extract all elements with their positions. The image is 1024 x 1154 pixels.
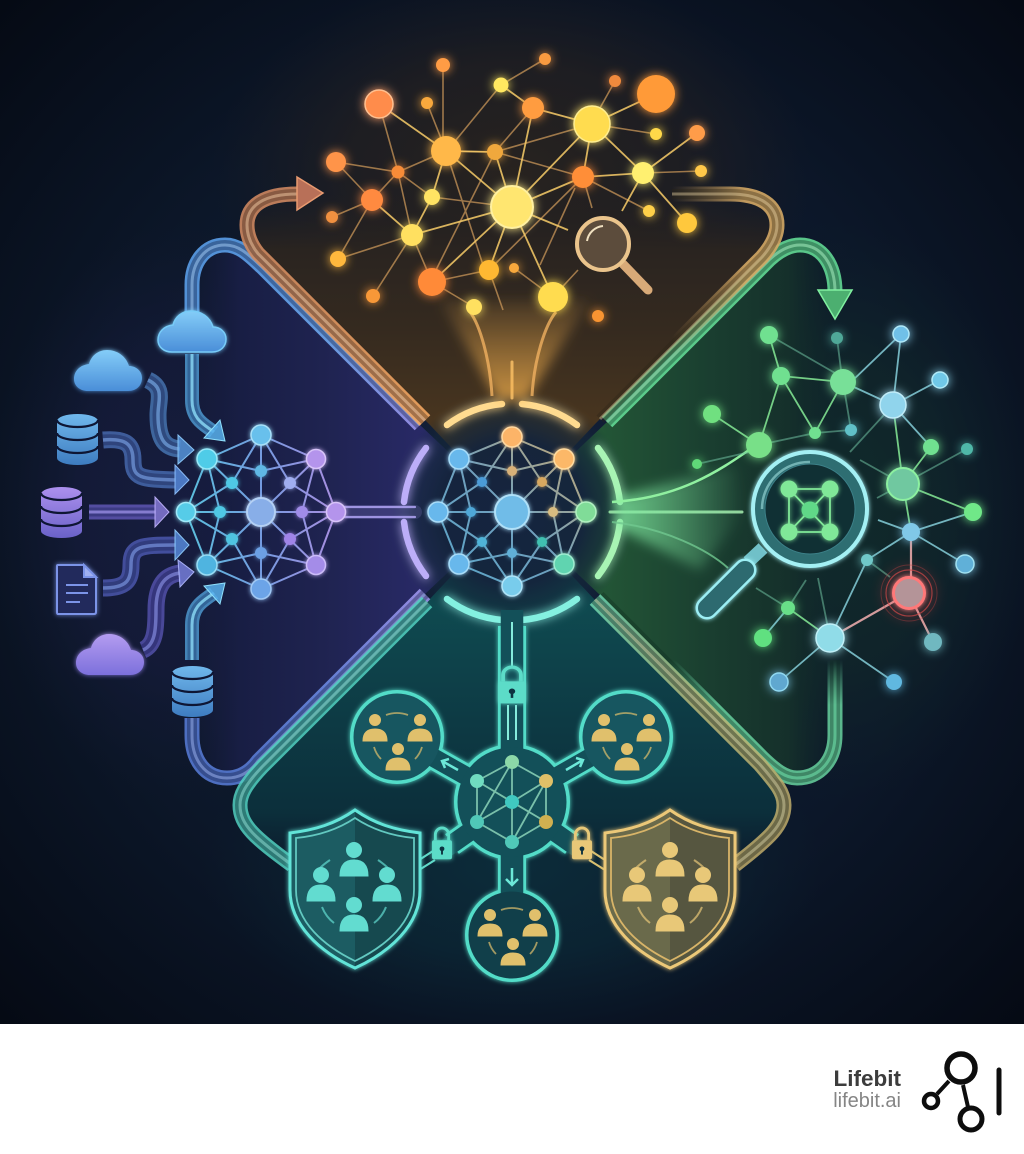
arrow: into discovery network (297, 177, 323, 210)
arrow: cloud to hub (148, 380, 194, 464)
icon: small magnifier (577, 218, 648, 290)
border band: blue lower (192, 594, 425, 778)
outline of joined shapes (350, 626, 673, 982)
background glow: bottom (202, 695, 822, 1035)
icon: database lower (172, 666, 213, 717)
network: central hub (428, 427, 596, 596)
network: federation hub graph (470, 755, 553, 849)
alert edges (830, 532, 933, 642)
network: analysis graph (692, 326, 982, 691)
arrow: discovery into analysis (818, 290, 852, 319)
left hub edges (186, 435, 336, 589)
central hub background (390, 390, 634, 634)
border band: green upper (607, 245, 835, 422)
panel: analysis (right, green) (512, 245, 835, 778)
left hub nodes (176, 425, 346, 599)
green edges (712, 335, 973, 638)
logo text: Lifebit (834, 1066, 901, 1091)
dim edges (697, 335, 967, 638)
connector: hub spokes (345, 362, 742, 517)
border band: gold (600, 194, 777, 419)
arrow: top cloud to hub (192, 354, 225, 441)
small direction arrows and stripes (419, 622, 605, 885)
border band: tan (595, 600, 784, 865)
icon: teal shield (290, 810, 420, 968)
icon: people group upper left (363, 713, 432, 770)
arrow: database to hub (103, 440, 189, 494)
icon: database purple (41, 487, 82, 538)
icon: cloud source upper (74, 350, 142, 391)
border band: teal left (240, 602, 427, 865)
inner arcs around hub (404, 404, 620, 620)
network: federated node structure (350, 610, 673, 982)
dim edges (332, 59, 701, 310)
panel: federation (bottom, teal) (240, 512, 784, 865)
icon: large magnifier (707, 452, 867, 608)
arrow: purple database to hub (89, 497, 169, 527)
icon: alert node (881, 565, 937, 621)
logo mark (924, 1054, 999, 1130)
icon: document (57, 565, 96, 614)
icon: lock right (572, 828, 592, 859)
icon: cloud source top (158, 311, 226, 352)
analysis nodes (692, 326, 982, 691)
hub nodes (428, 427, 596, 596)
icon: people group upper right (592, 713, 661, 770)
icon: lock left (432, 828, 452, 859)
panel: discovery (top, orange) (247, 194, 777, 512)
footer band (0, 1024, 1024, 1154)
arrow: lower database to hub (192, 583, 225, 660)
hub edges (438, 437, 586, 586)
flow: hub into magnifier (612, 448, 752, 570)
icon: cloud source lower (76, 634, 144, 675)
magnifier inner graph (780, 480, 838, 540)
icon: lock top (499, 667, 525, 703)
icon: gold shield (605, 810, 735, 968)
icon: database blue (57, 414, 98, 465)
border band: orange (247, 194, 425, 420)
blue edges (763, 334, 973, 682)
logo text (833, 1066, 901, 1112)
background glow: top (212, 0, 812, 380)
border band: blue upper (192, 245, 420, 425)
arrow: document to hub (103, 530, 189, 588)
inner fill of joined shapes (354, 610, 670, 978)
background glow: left (0, 222, 395, 802)
tree trunk into discovery network (440, 300, 590, 400)
arrow: purple cloud to hub (143, 560, 194, 650)
logo text: lifebit.ai (833, 1090, 901, 1112)
icon: people group bottom (478, 908, 547, 965)
network: left harmonised hub (176, 425, 346, 599)
nodes (326, 53, 707, 322)
background glow: right (630, 222, 1024, 802)
network: discovery graph (326, 53, 707, 322)
panel: harmonisation (left, blue-purple) (192, 245, 512, 778)
border band: green lower (600, 596, 835, 778)
bright edges (372, 85, 697, 297)
